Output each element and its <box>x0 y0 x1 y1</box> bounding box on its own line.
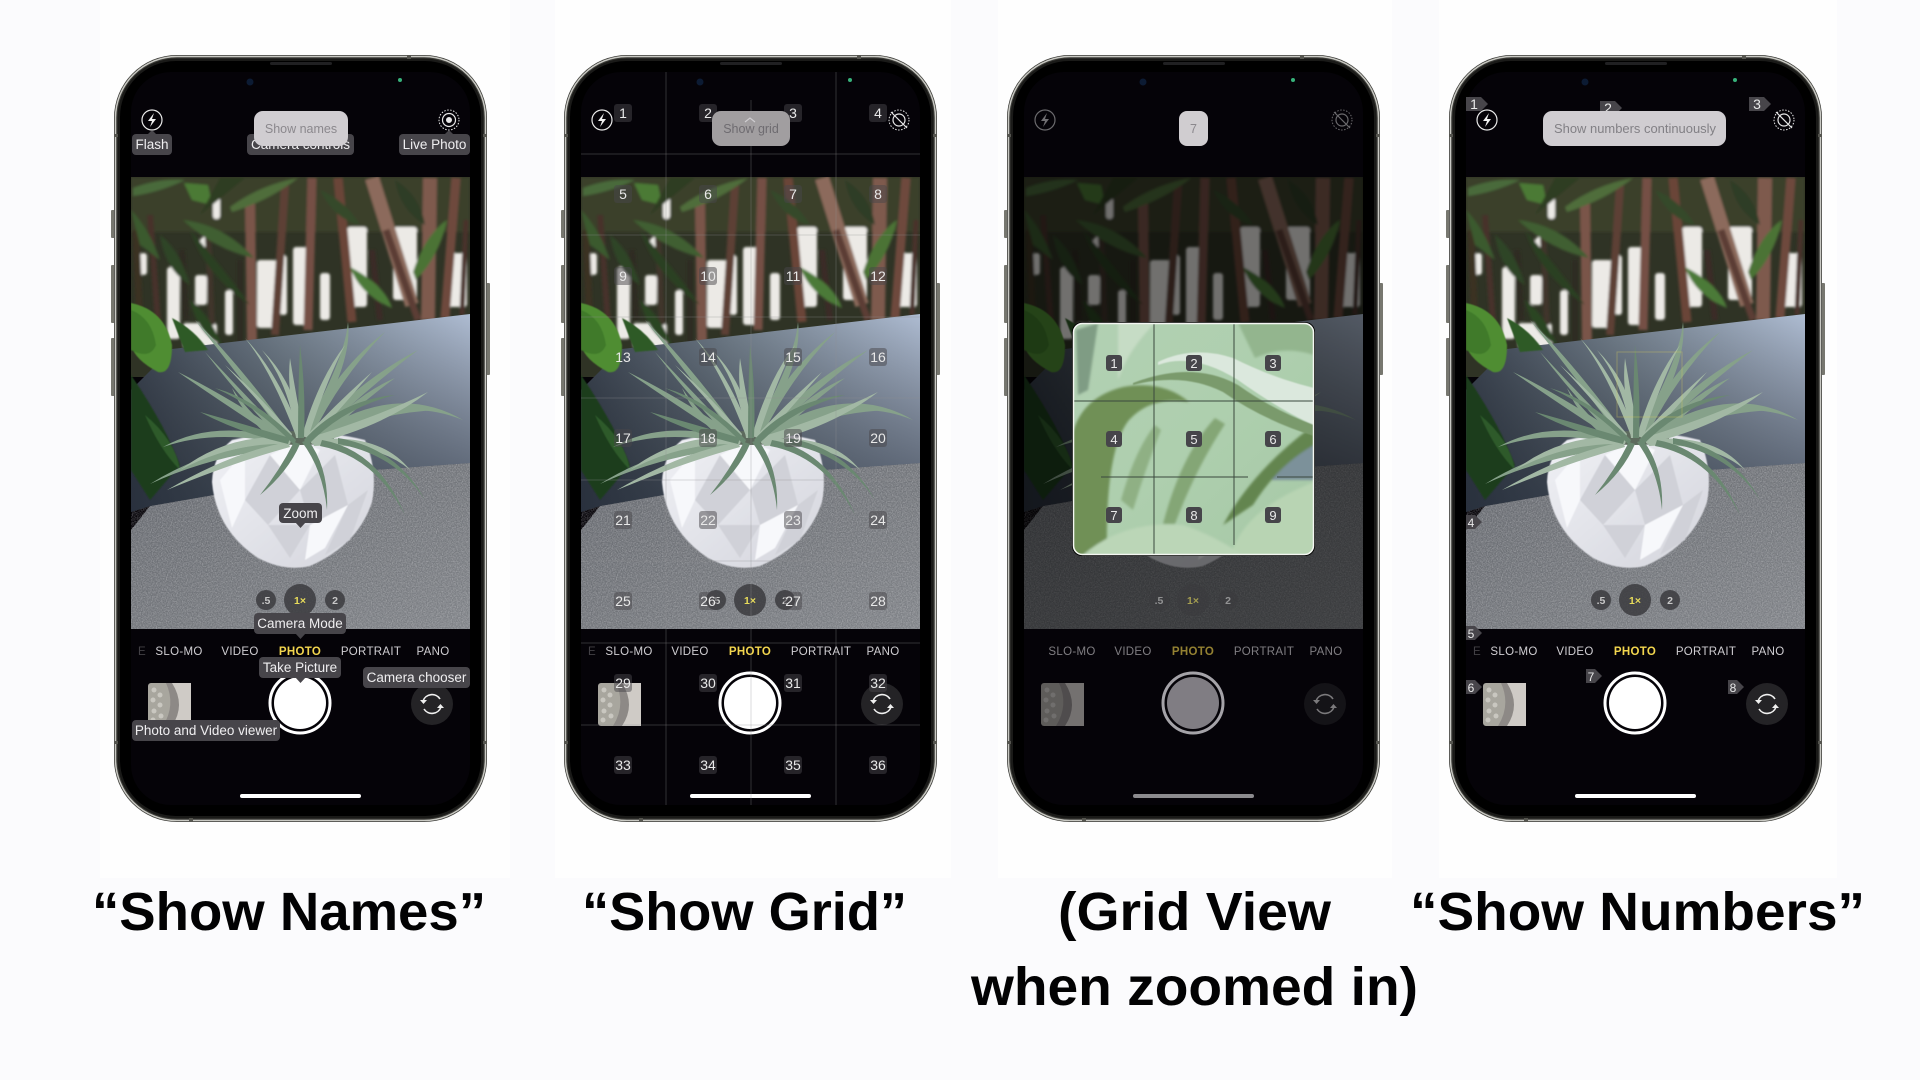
numbered grid tags: 34 <box>700 757 716 773</box>
thumbnail <box>598 683 641 726</box>
camera mode row: PORTRAIT <box>791 646 851 658</box>
phone frame 3 <box>1004 55 1383 822</box>
camera mode row <box>138 646 449 658</box>
home indicator dimmed <box>1133 794 1254 798</box>
numbered element tags: 7 <box>1588 670 1595 684</box>
caption: show names: “Show Names” <box>92 882 486 942</box>
label: zoom <box>279 503 322 528</box>
voice command pill: show numbers continuously: Show numbers continuously <box>1554 122 1717 136</box>
numbered element tags: 2 <box>1604 100 1612 116</box>
numbered grid tags: 18 <box>700 430 716 446</box>
numbered element tags: 5 <box>1468 627 1475 641</box>
shutter button <box>720 673 780 733</box>
label: camera mode <box>254 613 346 639</box>
numbered grid tags: 29 <box>615 675 631 691</box>
flash icon dimmed <box>1035 110 1055 130</box>
camera mode row: PANO <box>867 646 899 658</box>
label: zoom: Zoom <box>283 506 318 521</box>
shutter button <box>1605 673 1665 733</box>
shutter button <box>270 673 330 733</box>
numbered grid tags <box>614 104 887 774</box>
camera mode row dimmed: PHOTO <box>1172 646 1214 658</box>
label: camera controls: Camera controls <box>251 137 350 152</box>
numbered grid tags: 21 <box>615 512 631 528</box>
phone 1: show names <box>111 55 490 822</box>
camera mode row: PHOTO <box>729 646 771 658</box>
flash icon <box>592 110 612 130</box>
numbered grid tags: 35 <box>785 757 801 773</box>
zoom controls <box>706 584 795 616</box>
camera mode row: PANO <box>1752 646 1784 658</box>
label: photo and video viewer: Photo and Video viewer <box>135 723 278 738</box>
live photo off icon dimmed <box>1332 110 1352 130</box>
zoom controls: .5 <box>712 595 721 607</box>
numbered grid tags: 19 <box>785 430 801 446</box>
numbered grid tags: 12 <box>870 268 886 284</box>
camera mode row: VIDEO <box>671 646 709 658</box>
numbered grid tags: 33 <box>615 757 631 773</box>
zoom controls: 2 <box>332 595 338 607</box>
switch camera button <box>411 683 453 725</box>
label: take picture: Take Picture <box>263 660 337 675</box>
camera mode row dimmed: PORTRAIT <box>1234 646 1294 658</box>
phone frame 4 <box>1446 55 1825 822</box>
numbered grid tags: 24 <box>870 512 886 528</box>
zoom controls dimmed: 2 <box>1225 595 1231 607</box>
zoom controls <box>1591 584 1680 616</box>
overlay grid lines <box>581 72 920 805</box>
voice command pill: show names <box>254 111 348 146</box>
camera mode row: E <box>1473 646 1481 658</box>
numbered grid tags: 28 <box>870 593 886 609</box>
numbered grid tags: 1 <box>619 105 627 121</box>
magnified grid view: 8 <box>1190 508 1198 523</box>
voice command pill: show names: Show names <box>265 122 337 136</box>
magnified grid view: 7 <box>1110 508 1118 523</box>
voice command pill: 7 <box>1179 111 1208 146</box>
zoom controls: 2 <box>1667 595 1673 607</box>
numbered element tags: 4 <box>1468 516 1475 530</box>
zoom controls dimmed: .5 <box>1155 595 1164 607</box>
camera mode row: VIDEO <box>1556 646 1594 658</box>
label: live photo: Live Photo <box>403 137 466 152</box>
live photo off icon <box>889 110 909 130</box>
flash icon <box>1477 110 1497 130</box>
phone 3: grid view when zoomed in <box>1004 55 1383 822</box>
camera mode row: SLO-MO <box>1490 646 1538 658</box>
numbered grid tags: 15 <box>785 349 801 365</box>
numbered grid tags: 25 <box>615 593 631 609</box>
numbered element tags: 8 <box>1730 681 1737 695</box>
camera mode row dimmed <box>1048 646 1342 658</box>
label: camera controls <box>247 134 354 155</box>
numbered grid tags: 3 <box>789 105 797 121</box>
numbered grid tags: 17 <box>615 430 631 446</box>
label: camera chooser: Camera chooser <box>367 670 467 685</box>
zoom controls dimmed: 1× <box>1187 595 1199 607</box>
label: photo and video viewer <box>132 720 280 741</box>
numbered grid tags: 2 <box>704 105 712 121</box>
camera mode row: PANO <box>417 646 449 658</box>
numbered grid tags: 36 <box>870 757 886 773</box>
zoom controls <box>256 584 345 616</box>
camera mode row: PORTRAIT <box>1676 646 1736 658</box>
camera mode row: PHOTO <box>1614 646 1656 658</box>
numbered grid tags: 11 <box>786 268 800 284</box>
camera mode row dimmed: PANO <box>1310 646 1342 658</box>
home indicator <box>240 794 361 798</box>
phone frame 1 <box>111 55 490 822</box>
numbered grid tags: 23 <box>785 512 801 528</box>
zoom controls: .5 <box>262 595 271 607</box>
zoom controls: .5 <box>1597 595 1606 607</box>
numbered grid tags: 27 <box>785 593 801 609</box>
thumbnail dimmed <box>1041 683 1084 726</box>
camera photo 1 <box>131 177 470 629</box>
label: take picture <box>259 657 341 683</box>
live photo icon <box>439 110 459 130</box>
numbered grid tags: 5 <box>619 186 627 202</box>
voice command pill: show grid: Show grid <box>723 122 779 136</box>
caption: show grid: “Show Grid” <box>582 882 907 942</box>
magnified grid view: 4 <box>1110 432 1118 447</box>
phone 4: show numbers <box>1446 55 1825 822</box>
numbered grid tags: 32 <box>870 675 886 691</box>
numbered grid tags: 14 <box>700 349 716 365</box>
numbered grid tags: 16 <box>870 349 886 365</box>
numbered element tags: 1 <box>1470 96 1478 112</box>
dim overlay <box>1024 177 1363 629</box>
camera photo 2 <box>581 177 920 629</box>
phone frame 2 <box>561 55 940 822</box>
magnified grid view: 2 <box>1190 356 1198 371</box>
magnified grid view <box>1072 322 1315 556</box>
camera mode row dimmed: VIDEO <box>1114 646 1152 658</box>
home indicator <box>1575 794 1696 798</box>
camera mode row: SLO-MO <box>605 646 653 658</box>
switch camera button <box>861 683 903 725</box>
camera mode row <box>1473 646 1784 658</box>
zoom controls: 1× <box>294 595 306 607</box>
camera photo 3 <box>1024 177 1363 629</box>
camera mode row <box>588 646 899 658</box>
label: camera mode: Camera Mode <box>257 616 343 631</box>
numbered element tags: 6 <box>1468 681 1475 695</box>
live photo off icon <box>1774 110 1794 130</box>
numbered element tags <box>1466 96 1771 695</box>
numbered grid tags: 31 <box>785 675 801 691</box>
flash icon <box>142 110 162 130</box>
numbered grid tags: 13 <box>615 349 631 365</box>
voice command pill: show grid <box>712 111 790 146</box>
camera mode row: PHOTO <box>279 646 321 658</box>
switch camera button <box>1746 683 1788 725</box>
numbered grid tags: 30 <box>700 675 716 691</box>
label: flash: Flash <box>135 137 169 152</box>
numbered grid tags: 10 <box>700 268 716 284</box>
home indicator <box>690 794 811 798</box>
voice command pill: 7: 7 <box>1190 122 1197 136</box>
magnified grid view: 9 <box>1269 508 1277 523</box>
caption: show numbers: “Show Numbers” <box>1410 882 1865 942</box>
numbered grid tags: 26 <box>700 593 716 609</box>
camera mode row: E <box>588 646 596 658</box>
camera mode row: SLO-MO <box>155 646 203 658</box>
shutter button dimmed <box>1163 673 1223 733</box>
focus square <box>1617 352 1682 417</box>
label: camera chooser <box>363 667 470 688</box>
numbered element tags: 3 <box>1753 96 1761 112</box>
numbered grid tags: 7 <box>789 186 797 202</box>
numbered grid tags: 9 <box>619 268 627 284</box>
panel backdrops <box>100 0 1837 878</box>
zoom controls: 1× <box>1629 595 1641 607</box>
camera mode row dimmed: SLO-MO <box>1048 646 1096 658</box>
numbered grid tags: 22 <box>700 512 716 528</box>
phone 2: show grid <box>561 55 940 822</box>
thumbnail <box>1483 683 1526 726</box>
numbered grid tags: 6 <box>704 186 712 202</box>
camera mode row: PORTRAIT <box>341 646 401 658</box>
thumbnail <box>148 683 191 726</box>
magnified grid view: 5 <box>1190 432 1198 447</box>
camera mode row: E <box>138 646 146 658</box>
label: flash <box>132 130 172 155</box>
numbered grid tags: 4 <box>874 105 882 121</box>
caption: grid view when zoomed in <box>970 882 1418 1017</box>
voice command pill: show numbers continuously <box>1543 111 1726 146</box>
caption: grid view when zoomed in: when zoomed in) <box>970 957 1418 1017</box>
numbered grid tags: 20 <box>870 430 886 446</box>
zoom controls: 1× <box>744 595 756 607</box>
magnified grid view: 1 <box>1110 356 1118 371</box>
numbered grid tags: 8 <box>874 186 882 202</box>
camera photo 4 <box>1466 177 1805 629</box>
switch camera button dimmed <box>1304 683 1346 725</box>
magnified grid view: 6 <box>1269 432 1277 447</box>
zoom controls: 2 <box>782 595 788 607</box>
caption: grid view when zoomed in: (Grid View <box>1058 882 1332 942</box>
magnified grid view: 3 <box>1269 356 1277 371</box>
camera mode row: VIDEO <box>221 646 259 658</box>
zoom controls dimmed <box>1149 584 1238 616</box>
label: live photo <box>399 130 470 155</box>
